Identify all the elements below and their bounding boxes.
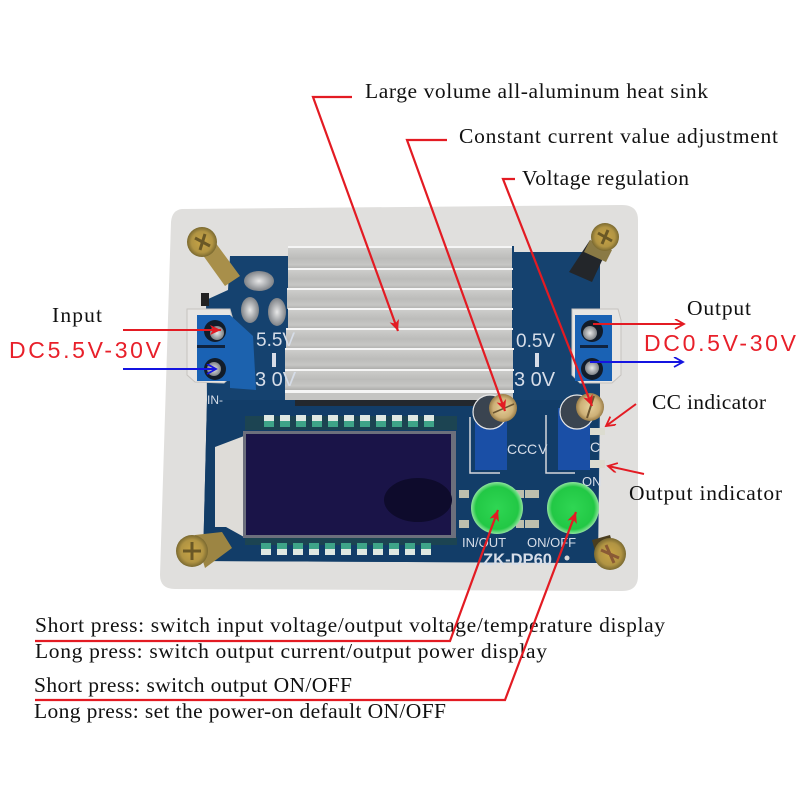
callout: input: Input [52,303,102,327]
button pads [459,490,539,528]
screw: bottom right [592,535,626,570]
callout: voltage regulation: Voltage regulation [522,166,689,190]
standoff: top left [187,227,240,286]
board labels: 5.5V [256,330,295,351]
circuit board [203,246,600,563]
callout: IN/OUT button: Long press: switch output current/output power display [35,639,547,663]
callout: IN/OUT button: Short press: switch input voltage/output voltage/temperature display [35,613,665,637]
callout: output: Output [687,296,751,320]
callout: output [590,296,797,362]
board labels: ON [582,474,602,489]
heat sink [285,246,514,406]
board labels: ZK-DP60 [483,550,552,569]
LCD screen [243,431,456,538]
board labels: CC [507,441,527,457]
board labels: CV [527,441,548,457]
board labels: 3 0V [255,369,297,391]
board labels: 3 0V [514,369,556,391]
callout: input: DC5.5V-30V [9,337,162,363]
callout: voltage regulation [503,166,689,406]
board labels: 0.5V [516,331,555,352]
notch [201,293,209,306]
callout: ON/OFF button: Short press: switch output ON/OFF [34,673,352,697]
callout: output: DC0.5V-30V [644,330,797,356]
LCD contact pads: top [245,415,457,430]
board labels [207,330,602,569]
board labels: IN- [207,393,223,407]
callout: input [9,303,221,369]
potentiometer: constant current [470,394,517,473]
button: ON/OFF [547,482,599,534]
indicator LEDs [590,428,605,468]
board labels: C [590,439,600,455]
callout: output indicator [608,466,782,505]
callout: ON/OFF button [34,512,576,723]
LCD contact pads: bottom [245,537,457,555]
callout: constant current adjustment [407,124,778,411]
callout: constant current adjustment: Constant current value adjustment [459,124,778,148]
callout: output indicator: Output indicator [629,481,782,505]
callout: IN/OUT button [35,510,665,663]
button: IN/OUT [471,482,523,534]
terminal block: input [187,309,256,390]
callout: CC indicator [606,390,766,426]
standoff: top right [569,223,619,282]
potentiometer: voltage [546,393,604,473]
acrylic plate [160,205,638,591]
callout: ON/OFF button: Long press: set the power-on default ON/OFF [34,699,446,723]
terminal block: output [572,309,621,383]
callout: heat sink [313,79,708,331]
callout: heat sink: Large volume all-aluminum heat sink [365,79,708,103]
screw: bottom left [176,532,232,568]
board labels: ON/OFF [527,535,576,550]
callout: CC indicator: CC indicator [652,390,766,414]
capacitor solder joints [241,271,286,326]
board labels: IN/OUT [462,535,506,550]
acrylic cut-out beside screen [215,436,244,537]
panel: module photo [160,205,638,591]
